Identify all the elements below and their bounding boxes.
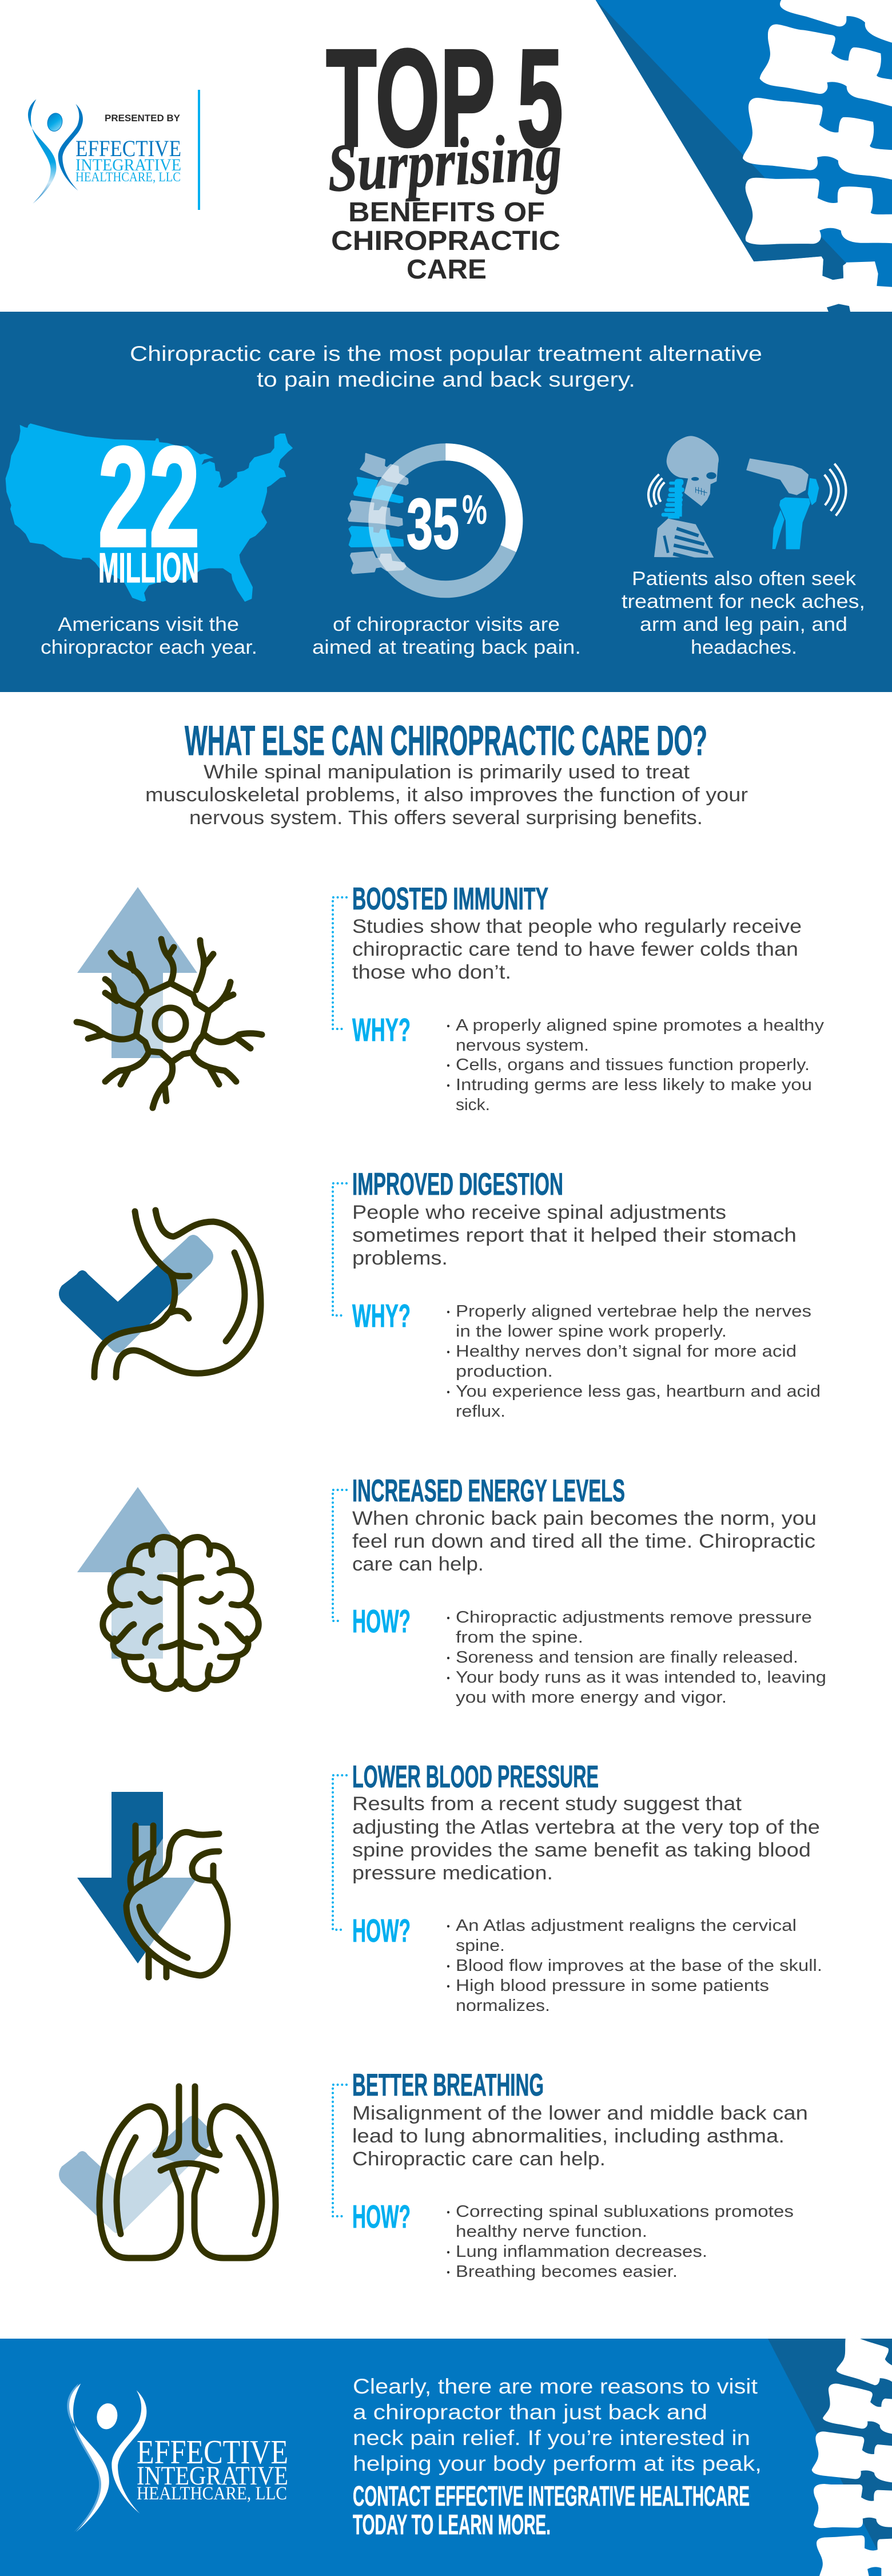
number: 35 percent: 35 (407, 484, 459, 564)
why list: A properly aligned spine promotes a healthy (456, 1016, 825, 1035)
icon: arrow and neuron (77, 887, 262, 1108)
logo wordmark (137, 2433, 288, 2504)
how list: Chiropractic adjustments remove pressure (456, 1608, 812, 1627)
how list: High blood pressure in some patients (456, 1977, 769, 1995)
how label: HOW? (352, 2199, 411, 2235)
logo figure (67, 2383, 146, 2532)
section body: sometimes report that it helped their stomach (352, 1225, 797, 1246)
logo: footer (67, 2383, 288, 2532)
logo wordmark: INTEGRATIVE (137, 2461, 288, 2491)
caption: back pain: aimed at treating back pain. (312, 637, 581, 658)
label: million: MILLION (98, 545, 199, 591)
connector dots (333, 1183, 347, 1315)
logo: presented by (28, 99, 181, 204)
section body: care can help. (352, 1553, 484, 1575)
how list: An Atlas adjustment realigns the cervical (456, 1917, 797, 1935)
title (326, 21, 564, 285)
section body (352, 916, 802, 983)
panel: improved digestion (59, 1166, 821, 1421)
how list: spine. (456, 1937, 505, 1955)
intro paragraph (145, 761, 748, 829)
how label: HOW? (352, 1603, 411, 1640)
spine graphic: footer (768, 2339, 892, 2576)
why list: production. (456, 1362, 553, 1381)
header background (0, 0, 892, 312)
why list: You experience less gas, heartburn and acid (456, 1382, 821, 1401)
title: CHIROPRACTIC (331, 226, 560, 256)
panel: footer (0, 2339, 892, 2576)
US map with 22 million (6, 417, 293, 602)
section body: People who receive spinal adjustments (352, 1202, 726, 1223)
how list: Soreness and tension are finally released. (456, 1648, 798, 1667)
section title: BOOSTED IMMUNITY (352, 881, 548, 916)
caption: back pain: of chiropractor visits are (333, 614, 560, 635)
section body (352, 1202, 797, 1269)
section body: Misalignment of the lower and middle back can (352, 2102, 808, 2124)
logo wordmark: HEALTHCARE, LLC (137, 2483, 287, 2504)
section title: BETTER BREATHING (352, 2067, 544, 2102)
why label: WHY? (352, 1012, 411, 1048)
call to action: TODAY TO LEARN MORE. (353, 2510, 551, 2541)
section title: INCREASED ENERGY LEVELS (352, 1473, 625, 1508)
donut chart: 35 percent with spine (348, 452, 514, 589)
title: Surprising (326, 119, 564, 206)
logo wordmark (75, 136, 181, 184)
section body: Results from a recent study suggest that (352, 1793, 742, 1815)
logo wordmark: EFFECTIVE (75, 136, 181, 161)
icon: pain waves (648, 464, 846, 516)
how list: Your body runs as it was intended to, leaving (456, 1668, 826, 1687)
intro text (130, 342, 762, 391)
icon: skull and neck (654, 436, 719, 559)
section body: Chiropractic care can help. (352, 2148, 606, 2170)
why label: WHY? (352, 1298, 411, 1334)
why list (447, 1016, 825, 1114)
intro paragraph: musculoskeletal problems, it also improves the function of your (145, 784, 748, 806)
icon: check and lungs (59, 2086, 286, 2265)
intro paragraph: While spinal manipulation is primarily used to treat (204, 761, 690, 783)
caption: other conditions: headaches. (691, 637, 797, 658)
closing text: helping your body perform at its peak, (353, 2452, 762, 2475)
caption: other conditions: arm and leg pain, and (640, 614, 847, 635)
presented by label: PRESENTED BY (105, 113, 181, 124)
panel: increased energy levels (77, 1473, 826, 1707)
caption: other conditions (622, 568, 865, 658)
title: TOP 5 (326, 21, 563, 176)
section body: When chronic back pain becomes the norm, you (352, 1508, 817, 1529)
intro paragraph: nervous system. This offers several surprising benefits. (189, 807, 703, 829)
closing text (353, 2375, 762, 2475)
section body (352, 1508, 817, 1575)
how list: healthy nerve function. (456, 2223, 647, 2241)
section body: Studies show that people who regularly receive (352, 916, 802, 937)
why list: Cells, organs and tissues function properly. (456, 1056, 810, 1074)
connector dots (333, 1775, 347, 1930)
why list: nervous system. (456, 1036, 589, 1055)
how list: from the spine. (456, 1628, 583, 1647)
spine behind donut (348, 454, 408, 573)
connector dots (333, 2085, 347, 2216)
why list (447, 1302, 821, 1421)
caption: other conditions: treatment for neck aches, (622, 591, 865, 613)
how list: Correcting spinal subluxations promotes (456, 2203, 794, 2221)
why list: reflux. (456, 1402, 505, 1421)
panel: statistics band (0, 312, 892, 692)
icon: knee (747, 459, 819, 549)
title: CARE (407, 255, 487, 285)
why list: Intruding germs are less likely to make you (456, 1076, 812, 1094)
panel: boosted immunity (77, 881, 825, 1114)
section body: lead to lung abnormalities, including asthma. (352, 2125, 785, 2147)
closing text: a chiropractor than just back and (353, 2400, 707, 2424)
why list: in the lower spine work properly. (456, 1322, 727, 1341)
why list: sick. (456, 1096, 490, 1114)
section title: LOWER BLOOD PRESSURE (352, 1759, 599, 1794)
how list (447, 1917, 822, 2015)
intro text: to pain medicine and back surgery. (257, 368, 635, 391)
logo wordmark: INTEGRATIVE (75, 156, 181, 174)
how list: Blood flow improves at the base of the skull. (456, 1957, 822, 1975)
caption: Americans: chiropractor each year. (41, 637, 257, 658)
donut ring (377, 452, 514, 589)
section body: chiropractic care tend to have fewer colds than (352, 939, 798, 960)
panel: lower blood pressure (77, 1759, 822, 2015)
donut segment (445, 452, 514, 548)
why list: Properly aligned vertebrae help the nerves (456, 1302, 811, 1321)
map: United States (6, 424, 293, 602)
how list (447, 2203, 794, 2281)
section title: IMPROVED DIGESTION (352, 1166, 563, 1202)
section body: adjusting the Atlas vertebra at the very top of the (352, 1816, 820, 1838)
caption: back pain (312, 614, 581, 658)
closing text: Clearly, there are more reasons to visit (353, 2375, 758, 2398)
icon: arrow and brain (77, 1487, 258, 1693)
section body: pressure medication. (352, 1862, 553, 1884)
caption: other conditions: Patients also often seek (632, 568, 857, 590)
caption: Americans: Americans visit the (58, 614, 239, 635)
panel: better breathing (59, 2067, 808, 2281)
closing text: neck pain relief. If you’re interested in (353, 2426, 750, 2450)
logo figure (28, 99, 83, 204)
icon: check and stomach (59, 1210, 261, 1377)
section body: those who don’t. (352, 961, 511, 983)
how list (447, 1608, 826, 1707)
number: 22: 22 (98, 417, 200, 577)
section body (352, 2102, 808, 2170)
title: BENEFITS OF (348, 197, 545, 228)
how list: normalizes. (456, 1997, 550, 2015)
call to action (353, 2481, 750, 2541)
section body: spine provides the same benefit as taking blood (352, 1839, 811, 1861)
why list: Healthy nerves don’t signal for more acid (456, 1342, 797, 1361)
connector dots (333, 897, 347, 1029)
connector dots (333, 1490, 347, 1621)
how label: HOW? (352, 1913, 411, 1949)
section body: feel run down and tired all the time. Chiropractic (352, 1531, 815, 1552)
number: 35 percent: % (462, 487, 487, 533)
icon: arrow and heart (77, 1792, 234, 1985)
how list: Breathing becomes easier. (456, 2263, 678, 2281)
spine graphic: header (596, 0, 892, 312)
section body (352, 1793, 820, 1884)
how list: you with more energy and vigor. (456, 1688, 727, 1707)
logo wordmark: HEALTHCARE, LLC (75, 170, 181, 184)
logo wordmark: EFFECTIVE (137, 2433, 288, 2471)
section body: problems. (352, 1247, 448, 1269)
how list: Lung inflammation decreases. (456, 2243, 707, 2261)
intro text: Chiropractic care is the most popular treatment alternative (130, 342, 762, 365)
caption: Americans (41, 614, 257, 658)
